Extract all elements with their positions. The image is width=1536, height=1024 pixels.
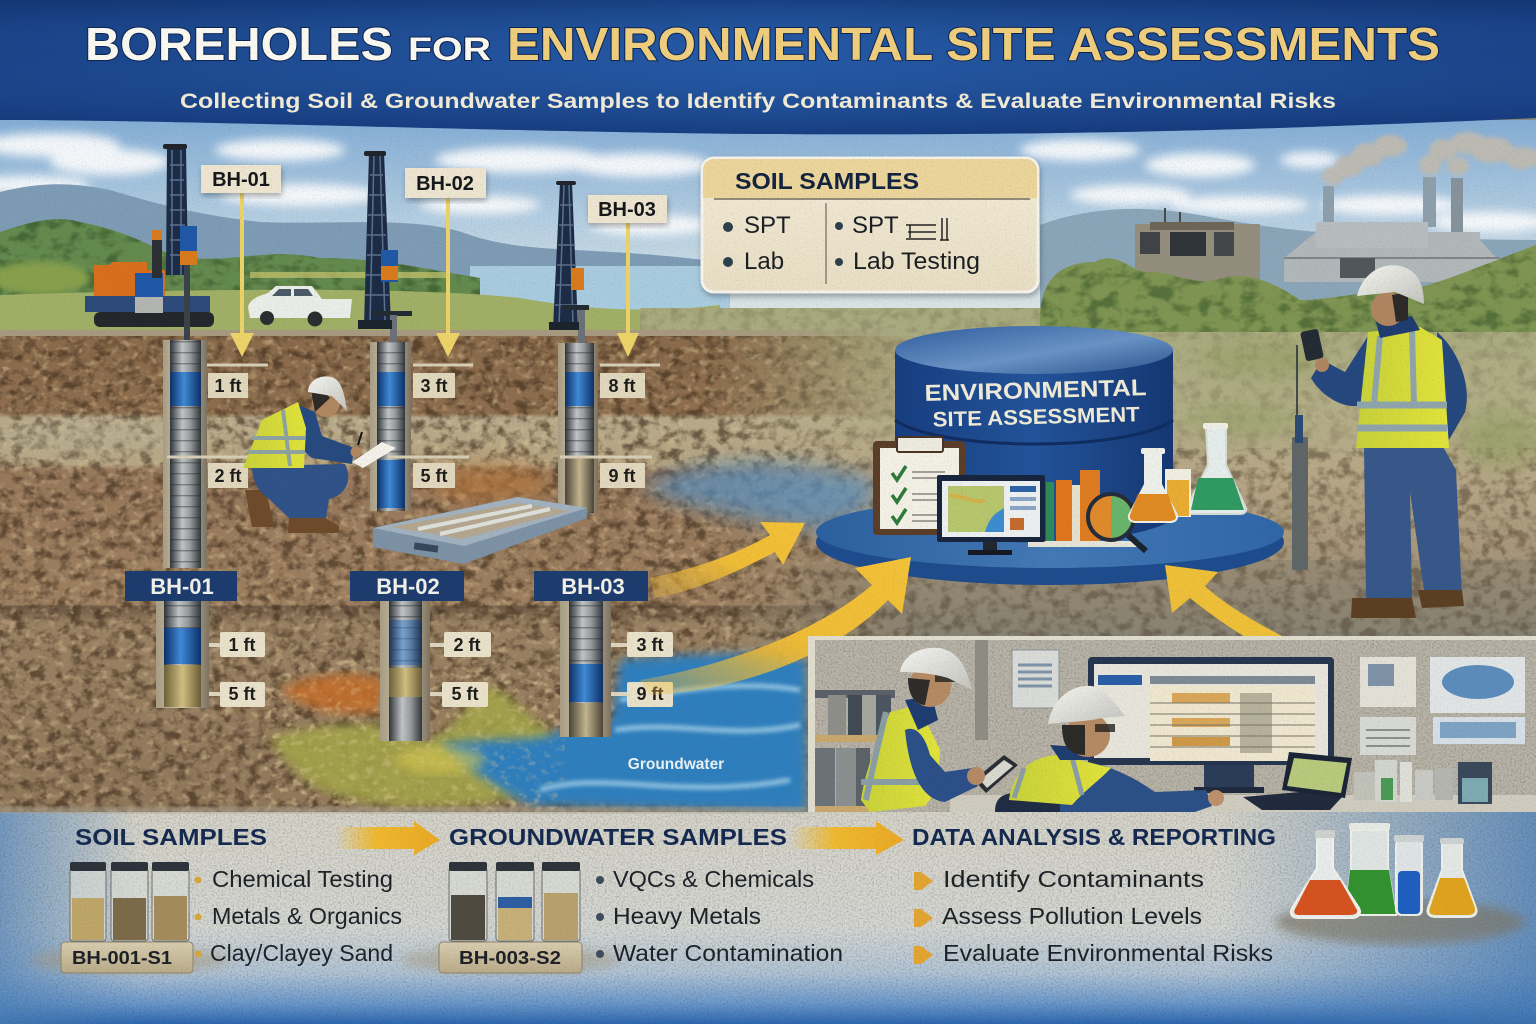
standing field worker with probe — [1292, 265, 1467, 618]
lower depth labels: 5 ft — [228, 684, 256, 704]
desktop monitor with data table — [1088, 657, 1334, 793]
bushes around site — [1040, 240, 1536, 335]
drilling rig carrier BH-01 — [85, 230, 214, 327]
upper water stream — [640, 462, 875, 530]
upper depth labels: 8 ft — [608, 376, 636, 396]
callout list: SPT — [744, 212, 791, 239]
white pickup truck — [248, 286, 352, 326]
heading: data analysis and reporting: DATA ANALYSIS & REPORTING — [912, 824, 1276, 850]
groundwater sample list — [596, 866, 843, 966]
lower depth labels — [209, 632, 673, 707]
navy borehole label BH-01: BH-01 — [150, 574, 214, 599]
landscape sky and clouds — [0, 120, 1536, 320]
bottom summary panel — [0, 807, 1536, 1024]
core sample tray — [373, 497, 587, 564]
factory with chimneys — [1284, 177, 1500, 282]
navy borehole label BH-02: BH-02 — [376, 574, 440, 599]
office analysis inset — [815, 640, 1536, 812]
red flask — [1291, 830, 1360, 918]
magnifying glass — [1088, 494, 1146, 551]
lower depth labels: 9 ft — [636, 684, 664, 704]
upper borehole casing BH-03 — [558, 343, 598, 513]
reporting list — [914, 866, 1273, 966]
sample tag BH-003-S2: BH-003-S2 — [459, 948, 561, 968]
tag and arrow BH-01 — [201, 165, 281, 357]
wall documents — [1012, 650, 1525, 755]
soil sample list — [194, 866, 402, 966]
callout list: Lab Testing — [853, 248, 980, 275]
soil samples callout — [702, 158, 1038, 292]
callout list: SPT — [852, 212, 899, 239]
upper depth labels — [208, 373, 645, 488]
yellow flask — [1427, 838, 1477, 917]
distant hills and lake — [0, 184, 1536, 320]
standing analyst with tablet — [861, 648, 1018, 812]
upper depth labels: 2 ft — [214, 466, 242, 486]
heading: soil samples: SOIL SAMPLES — [75, 824, 267, 850]
yellow flow arrow from groundwater — [640, 557, 911, 695]
cylinder label: ENVIRONMENTAL — [924, 374, 1147, 406]
right ground and meadow — [640, 308, 1536, 643]
sample tag BH-003-S2 — [439, 942, 582, 973]
cylinder label — [924, 374, 1147, 432]
lower depth labels: 1 ft — [228, 635, 256, 655]
tag and arrow BH-01: BH-01 — [212, 169, 270, 191]
bar chart books — [1028, 470, 1140, 547]
subtitle: Collecting Soil & Groundwater Samples to Identify Contaminants & Evaluate Environmental Risks — [180, 90, 1336, 113]
soil sample list: Clay/Clayey Sand — [210, 940, 393, 966]
upper depth labels: 9 ft — [608, 466, 636, 486]
lower depth labels: 2 ft — [454, 635, 481, 655]
soil sample list: Chemical Testing — [212, 866, 393, 892]
crouching field worker — [243, 376, 396, 533]
callout list: Lab — [744, 248, 784, 275]
yellow flow arrow from lab — [1165, 565, 1290, 640]
lower depth labels: 3 ft — [636, 635, 664, 655]
laptop — [1243, 752, 1352, 810]
grassy field — [0, 272, 720, 335]
navy borehole label BH-02 — [350, 571, 464, 601]
tag and arrow BH-02: BH-02 — [416, 173, 474, 195]
heading: groundwater samples: GROUNDWATER SAMPLES — [449, 824, 787, 850]
groundwater sample jars — [439, 862, 582, 973]
callout heading: SOIL SAMPLES — [735, 168, 919, 194]
assessment platform — [816, 496, 1284, 585]
header banner — [0, 0, 1536, 134]
upper depth labels: 1 ft — [214, 376, 242, 396]
monitor with site map — [937, 475, 1045, 555]
tag and arrow BH-02 — [405, 168, 486, 357]
clipboard checklist — [873, 437, 965, 535]
reporting list: Assess Pollution Levels — [942, 903, 1202, 929]
ochre contaminated soil patches — [0, 422, 550, 502]
blue test tube — [1394, 835, 1424, 915]
lower borehole casing BH-03 — [560, 601, 611, 737]
upper borehole casing BH-01 — [163, 340, 207, 568]
soil sample list: Metals & Organics — [212, 903, 402, 929]
colored chemistry flasks — [1291, 823, 1477, 918]
tag and arrow BH-03: BH-03 — [598, 199, 656, 221]
depth guide lines — [167, 365, 660, 457]
upper depth labels: 3 ft — [420, 376, 448, 396]
groundwater plume — [265, 654, 806, 812]
inset frame — [808, 636, 1536, 812]
arrow: soil to groundwater — [335, 821, 440, 855]
soil cross-section layers — [0, 326, 960, 820]
reporting list: Evaluate Environmental Risks — [943, 940, 1273, 966]
laboratory flasks on platform — [1128, 423, 1246, 523]
groundwater sample list: Heavy Metals — [613, 903, 761, 929]
yellow flow arrow from soil — [650, 522, 805, 598]
sample bottles on bench — [1354, 760, 1492, 804]
green flask — [1345, 823, 1396, 915]
groundwater label: Groundwater — [628, 756, 724, 773]
navy borehole label BH-03 — [534, 571, 648, 601]
environmental site assessment cylinder — [895, 326, 1173, 542]
sample tag BH-001-S1: BH-001-S1 — [72, 948, 172, 968]
callout list — [723, 212, 980, 275]
groundwater sample list: VQCs & Chemicals — [613, 866, 814, 892]
seated analyst — [995, 686, 1224, 812]
title: FOR — [408, 31, 491, 67]
reporting list: Identify Contaminants — [943, 866, 1204, 892]
drill mast BH-02 — [358, 151, 412, 343]
groundwater sample list: Water Contamination — [613, 940, 843, 966]
desk surface — [950, 795, 1536, 812]
navy borehole label BH-01 — [125, 571, 237, 601]
tag and arrow BH-03 — [588, 195, 667, 357]
chimney smoke — [1322, 132, 1536, 185]
upper depth labels: 5 ft — [420, 466, 448, 486]
navy borehole label BH-03: BH-03 — [561, 574, 625, 599]
drill mast BH-03 — [549, 181, 589, 343]
title: BOREHOLES — [85, 18, 393, 70]
soil sample jars — [61, 862, 193, 973]
upper borehole casing BH-02 — [370, 342, 411, 511]
lower depth labels: 5 ft — [452, 684, 479, 704]
lower borehole casing BH-02 — [380, 601, 430, 741]
title: ENVIRONMENTAL SITE ASSESSMENTS — [507, 18, 1440, 70]
shelves with binders — [815, 690, 895, 812]
abandoned building — [1135, 208, 1260, 290]
arrow: groundwater to reporting — [790, 821, 904, 855]
lower borehole casing BH-01 — [156, 601, 209, 708]
drill mast BH-01 — [163, 144, 197, 340]
cylinder label: SITE ASSESSMENT — [932, 403, 1140, 432]
